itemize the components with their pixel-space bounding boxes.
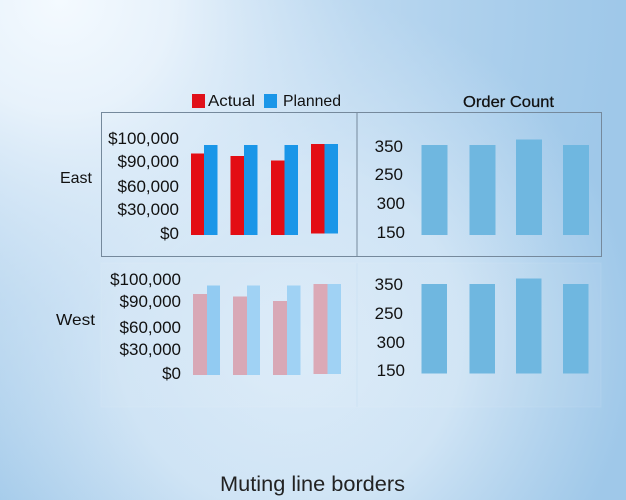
axis labels: east sales: $60,000 [118, 177, 179, 196]
heading: order count: Order Count [463, 94, 555, 111]
axis labels: east order count: 150 [377, 223, 405, 242]
row label: East: East [60, 170, 93, 187]
axis labels: west order count: 300 [377, 333, 405, 352]
bar chart: west order count [422, 278, 588, 374]
axis labels: east sales: $90,000 [118, 152, 179, 171]
axis labels: east order count [375, 137, 405, 242]
bar chart: east actual vs planned [191, 144, 338, 235]
axis labels: west order count [375, 275, 405, 380]
axis labels: west order count: 250 [375, 304, 403, 323]
legend: planned label: Planned [283, 93, 341, 110]
legend: actual label: Actual [208, 93, 255, 110]
axis labels: east sales: $0 [160, 224, 179, 243]
axis labels: west sales: $30,000 [120, 340, 181, 359]
caption: Muting line borders [220, 473, 405, 496]
axis labels: west sales: $90,000 [120, 292, 181, 311]
axis labels: west order count: 350 [375, 275, 403, 294]
legend [192, 93, 341, 110]
axis labels: west sales: $100,000 [110, 270, 181, 289]
axis labels: west sales [110, 270, 181, 383]
axis labels: east sales [108, 129, 179, 243]
axis labels: east order count: 250 [375, 165, 403, 184]
legend: planned swatch [264, 94, 277, 108]
axis labels: west sales: $60,000 [120, 318, 181, 337]
row label: West: West [56, 312, 96, 329]
axis labels: east sales: $30,000 [118, 200, 179, 219]
axis labels: east sales: $100,000 [108, 129, 179, 148]
panel divider: west [356, 263, 358, 407]
panel: west muted background [101, 263, 601, 407]
axis labels: east order count: 350 [375, 137, 403, 156]
axis labels: west order count: 150 [377, 361, 405, 380]
bar chart: west muted actual vs planned [193, 284, 341, 375]
bar chart: east order count [422, 140, 589, 235]
axis labels: east order count: 300 [377, 194, 405, 213]
axis labels: west sales: $0 [162, 364, 181, 383]
legend: actual swatch [192, 94, 205, 108]
panel: east border [102, 112, 602, 256]
